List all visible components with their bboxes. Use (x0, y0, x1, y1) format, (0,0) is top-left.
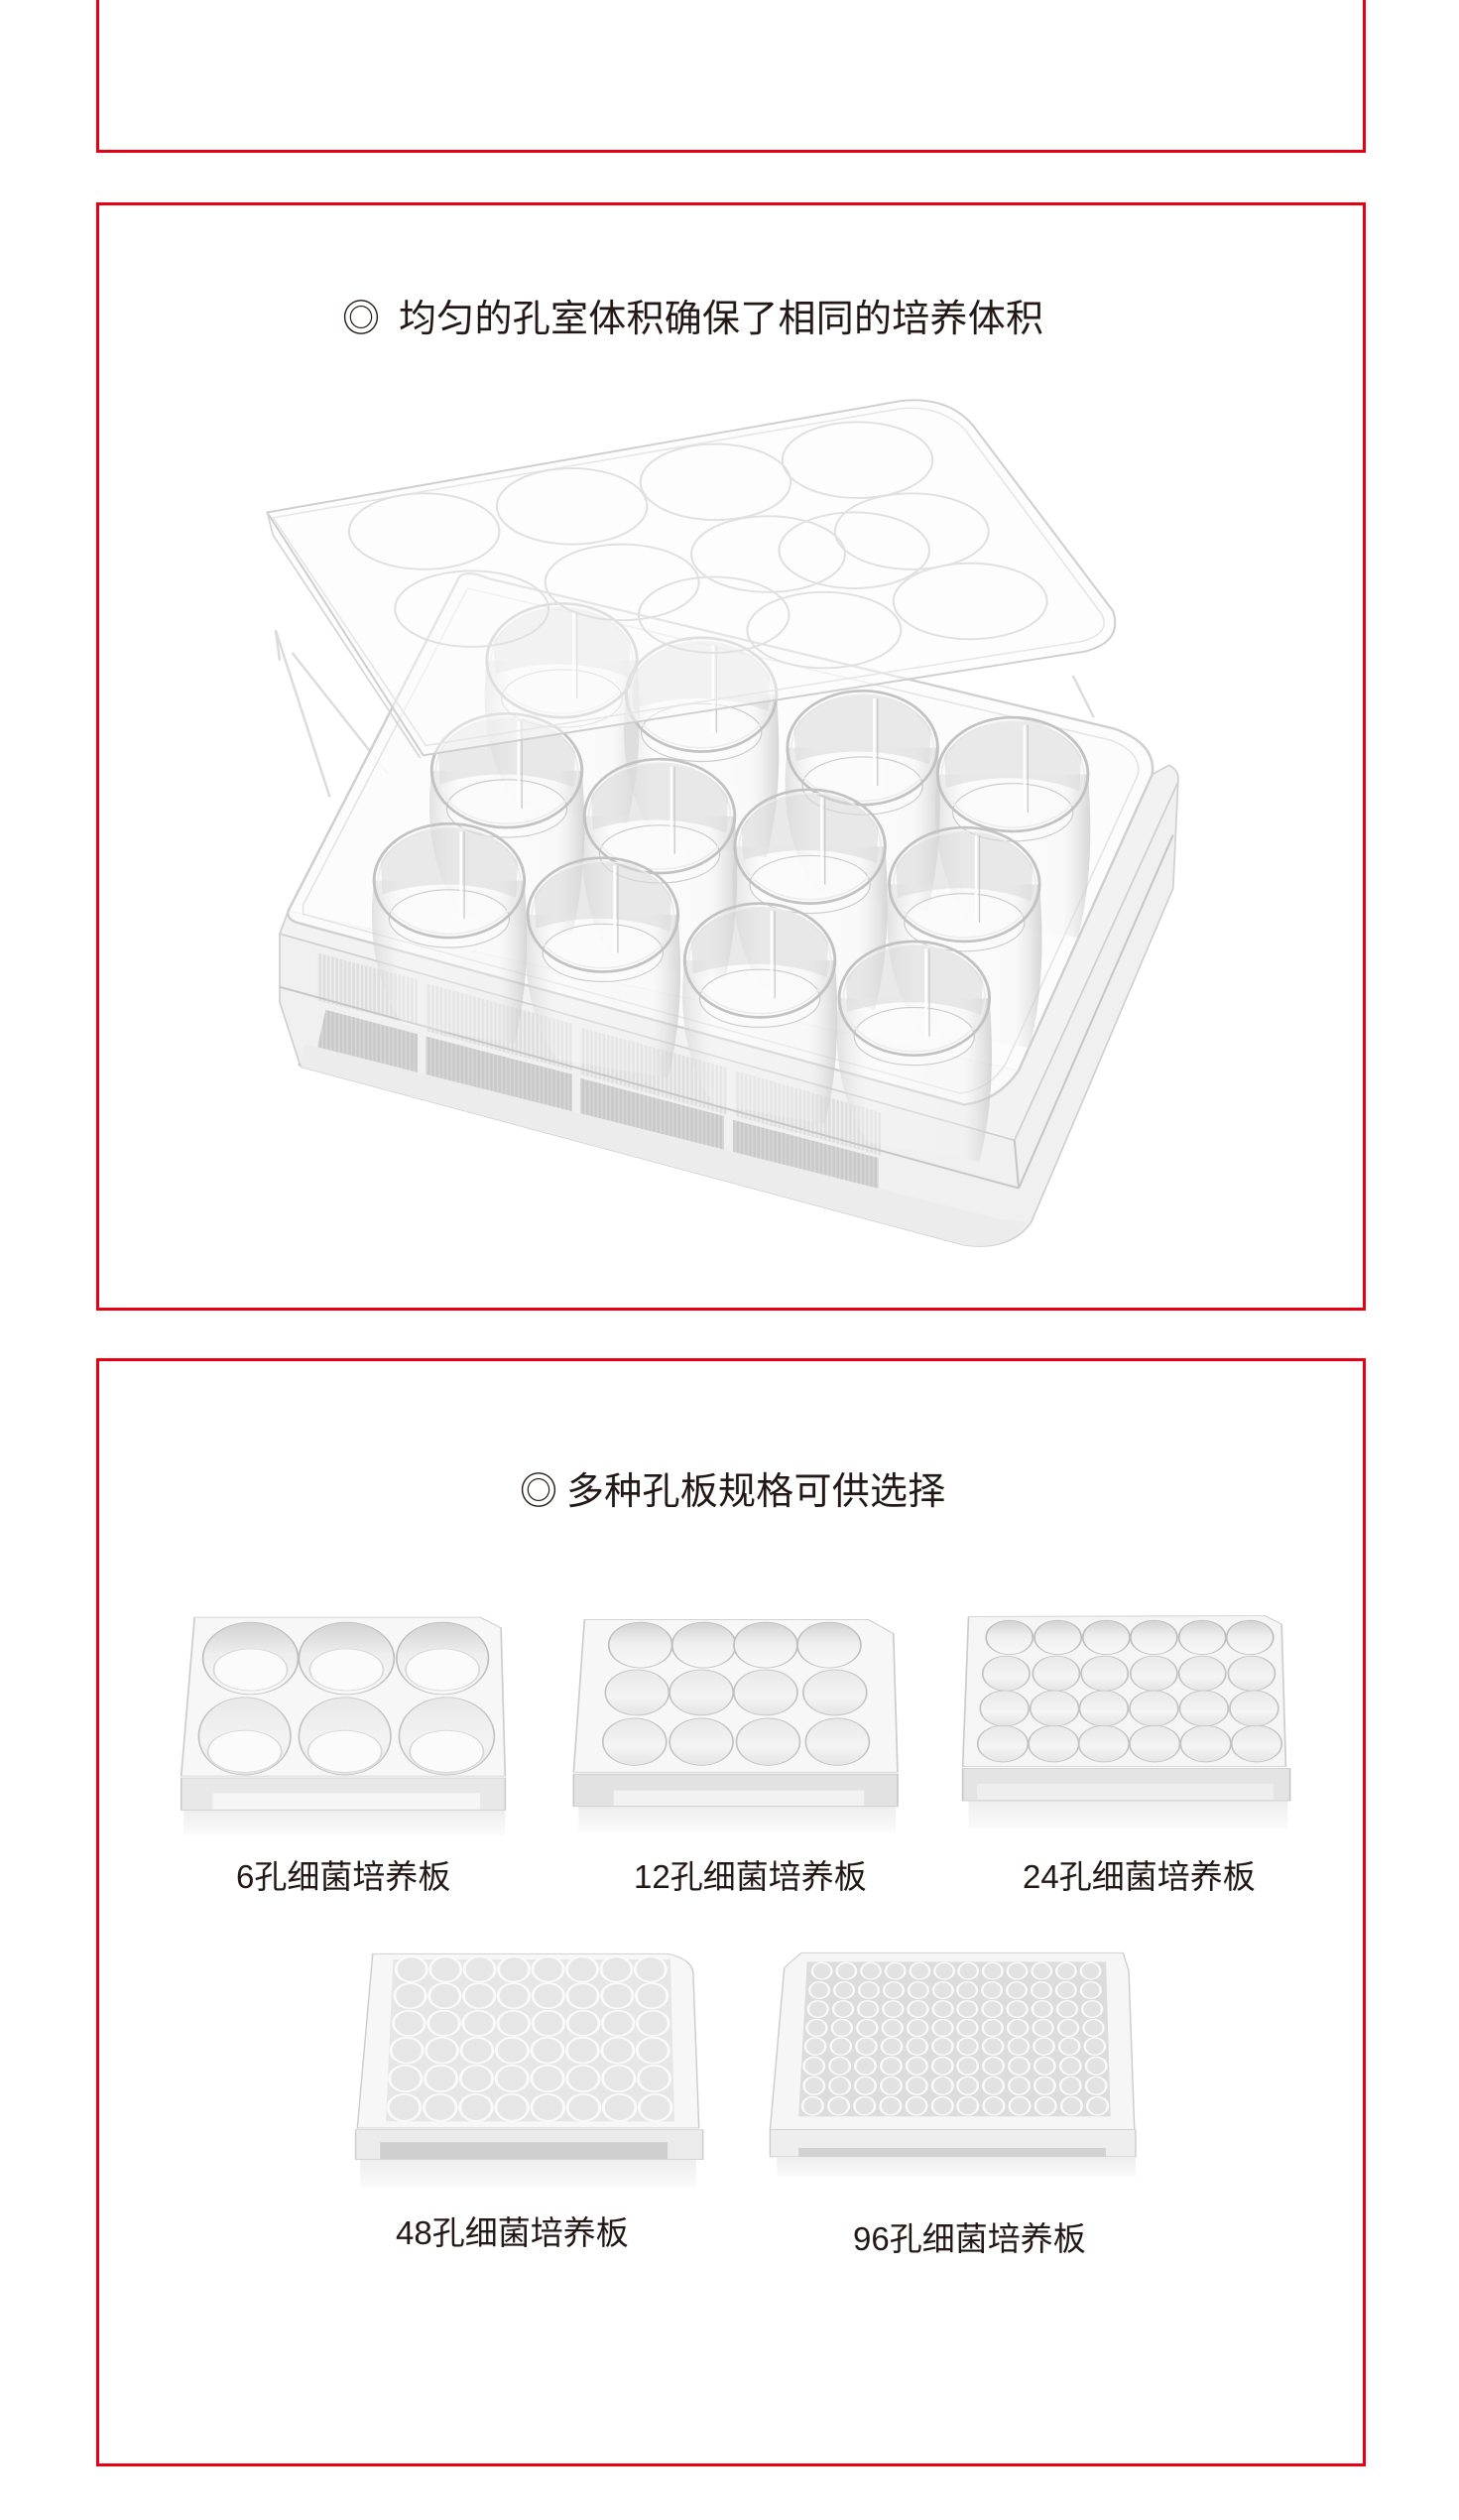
caption: 6 well: 6孔细菌培养板 (236, 1858, 450, 1895)
image: 96-well plate (770, 1953, 1136, 2177)
caption: 96 well: 96孔细菌培养板 (853, 2220, 1086, 2257)
caption: 48 well: 48孔细菌培养板 (396, 2214, 629, 2251)
image: 12-well plate (573, 1619, 898, 1833)
panel: plate formats (96, 1358, 1366, 2466)
wells (372, 603, 1090, 1162)
plate base walls (280, 765, 1178, 1246)
heading: plate formats: ◎ (520, 1471, 557, 1513)
plate top deck (288, 573, 1153, 1104)
panel: top cropped frame (96, 0, 1366, 153)
image: 12-well plate with lid (267, 400, 1178, 1246)
caption: 12 well: 12孔细菌培养板 (634, 1858, 867, 1895)
image: 6-well plate (182, 1617, 505, 1834)
panel: uniform well volume (96, 202, 1366, 1311)
rear plate edge beneath lid (276, 630, 1094, 797)
caption: 24 well: 24孔细菌培养板 (1023, 1858, 1256, 1895)
heading: uniform well volume: 均匀的孔室体积确保了相同的培养体积 (399, 299, 1043, 340)
lid (267, 400, 1115, 758)
heading: plate formats: 多种孔板规格可供选择 (566, 1471, 946, 1513)
heading: uniform well volume: ◎ (342, 299, 380, 340)
image: 48-well plate (356, 1953, 703, 2188)
image: 24-well plate (963, 1616, 1290, 1829)
